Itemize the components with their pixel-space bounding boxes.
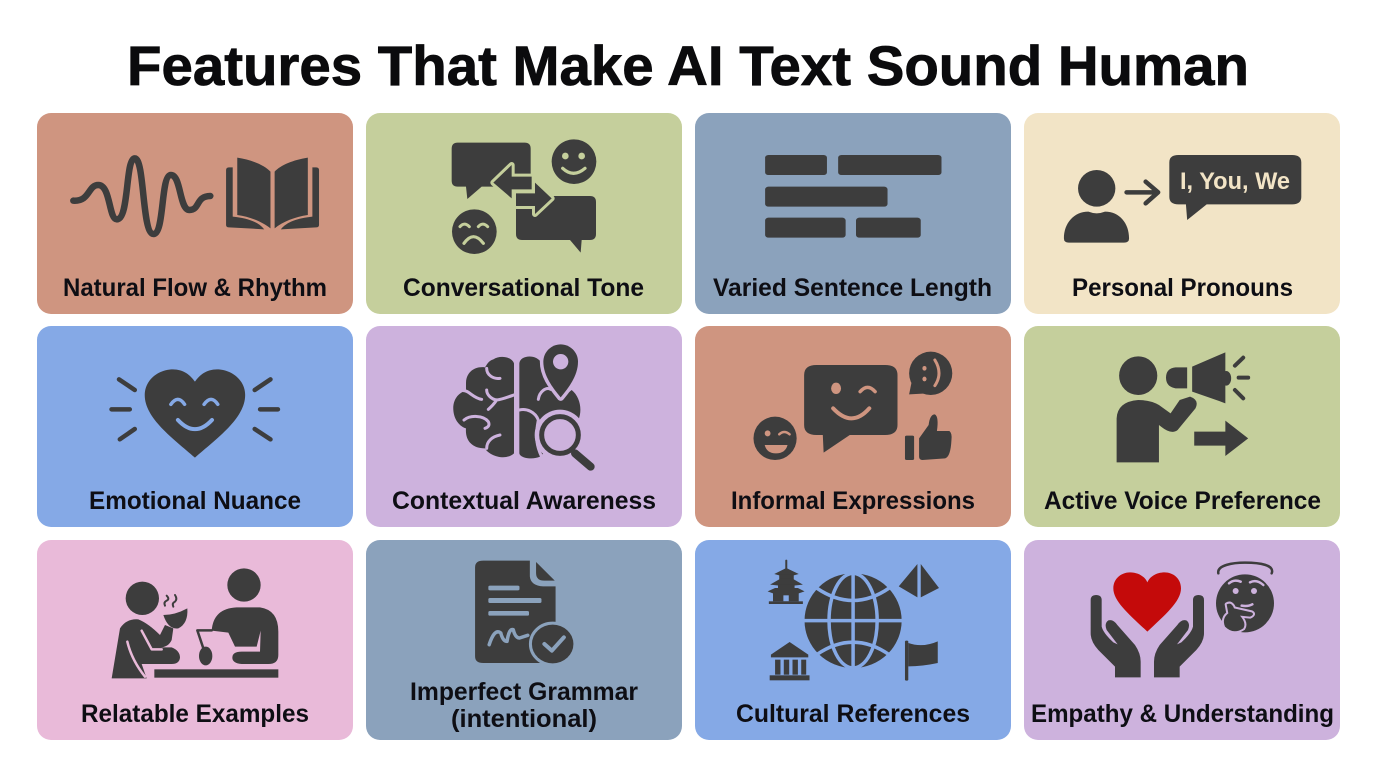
label: Contextual Awareness: [392, 487, 656, 515]
panel: imperfect grammar: [366, 540, 682, 740]
label: Natural Flow & Rhythm: [63, 274, 327, 302]
panel: informal expressions: [695, 326, 1011, 527]
icon: winking bubble, faces and thumbs up: [753, 352, 952, 460]
label: Informal Expressions: [731, 487, 975, 515]
card background: [1024, 113, 1340, 314]
panel: contextual awareness: [366, 326, 682, 527]
card background: [37, 326, 353, 527]
label: Personal Pronouns: [1072, 274, 1293, 302]
panel: cultural references: [695, 540, 1011, 740]
icon: speech bubbles, arrows and faces: [452, 139, 596, 254]
card background: [695, 113, 1011, 314]
label: Cultural References: [736, 700, 970, 728]
panel: conversational tone: [366, 113, 682, 314]
card background: [1024, 540, 1340, 740]
icon: brain with pin and magnifier: [453, 344, 591, 467]
icon: smiling heart with rays: [112, 369, 278, 458]
label: [410, 678, 638, 733]
card background: [366, 540, 682, 740]
card background: [695, 540, 1011, 740]
label: Active Voice Preference: [1044, 487, 1321, 515]
card background: [37, 540, 353, 740]
label: Relatable Examples: [81, 700, 309, 728]
icon: globe with landmarks: [768, 561, 939, 681]
label: Empathy & Understanding: [1031, 700, 1334, 728]
icon: document with signature and check badge: [475, 561, 573, 663]
icon: text bars of varied length: [765, 155, 941, 238]
panel: personal pronouns: [1024, 113, 1340, 314]
icon: two people at a table: [112, 568, 278, 678]
panel: active voice preference: [1024, 326, 1340, 527]
card background: [695, 326, 1011, 527]
bubble text: I, You, We: [1180, 168, 1290, 195]
panel: varied sentence length: [695, 113, 1011, 314]
card background: [37, 113, 353, 314]
card background: [366, 113, 682, 314]
label: Imperfect Grammar: [410, 678, 638, 706]
card background: [1024, 326, 1340, 527]
icon: hands holding heart and thinking face: [1091, 563, 1274, 677]
icon: person with speech bubble: [1064, 155, 1301, 243]
label: Emotional Nuance: [89, 487, 301, 515]
label: Conversational Tone: [403, 274, 644, 302]
label: Varied Sentence Length: [713, 274, 992, 302]
label: (intentional): [451, 705, 597, 733]
panel: relatable examples: [37, 540, 353, 740]
icon: person with megaphone and arrow: [1117, 352, 1248, 462]
title: Features That Make AI Text Sound Human: [127, 34, 1249, 97]
panel: emotional nuance: [37, 326, 353, 527]
panel: natural flow and rhythm: [37, 113, 353, 314]
icon: sound wave and open book: [73, 158, 319, 234]
card background: [366, 326, 682, 527]
panel: empathy and understanding: [1024, 540, 1340, 740]
